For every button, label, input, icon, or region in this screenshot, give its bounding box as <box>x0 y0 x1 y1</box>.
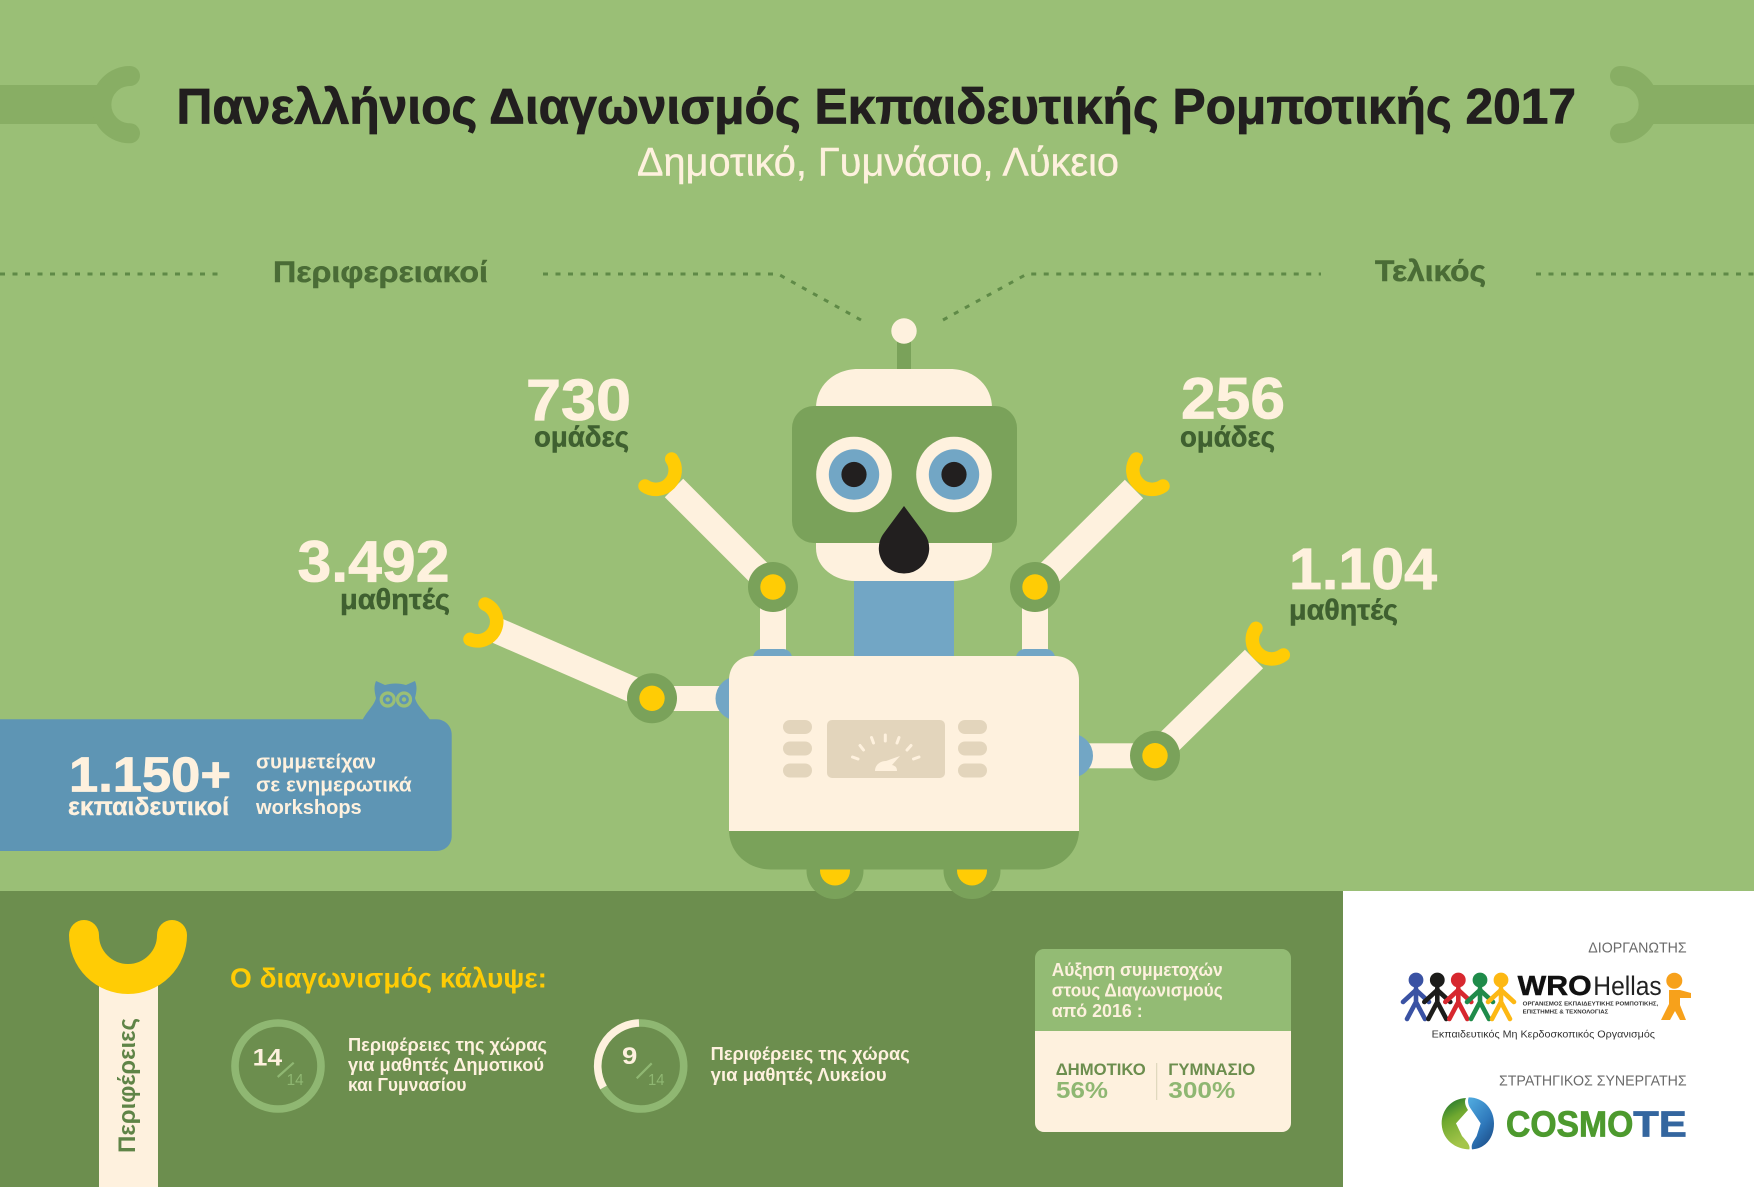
panel: teachers callout <box>0 681 452 851</box>
label: strategic partner: ΣΤΡΑΤΗΓΙΚΟΣ ΣΥΝΕΡΓΑΤΗΣ <box>1499 1073 1687 1090</box>
icon: owl <box>362 681 431 721</box>
heading: coverage: Ο διαγωνισμός κάλυψε: <box>230 963 547 994</box>
title: Πανελλήνιος Διαγωνισμός Εκπαιδευτικής Ρομποτικής 2017 <box>176 78 1576 134</box>
ring chart: 14 of 14 <box>235 1023 321 1109</box>
panel: growth box <box>1035 949 1291 1132</box>
ring chart: 14 of 14: 14 <box>287 1072 304 1089</box>
arm: upper right <box>1010 459 1163 669</box>
callout description <box>255 750 412 819</box>
callout box <box>0 719 452 851</box>
growth: primary <box>1056 1060 1146 1103</box>
growth heading: Αύξηση συμμετοχών <box>1052 960 1223 981</box>
text: upper secondary regions: για μαθητές Λυκείου <box>711 1065 887 1085</box>
stat: 3.492 students: 3.492 <box>298 530 450 595</box>
callout description: σε ενημερωτικά <box>256 774 412 797</box>
growth: lower secondary: ΓΥΜΝΑΣΙΟ <box>1168 1060 1255 1079</box>
organisation name small print: ΟΡΓΑΝΙΣΜΟΣ ΕΚΠΑΙΔΕΥΤΙΚΗΣ ΡΟΜΠΟΤΙΚΗΣ, <box>1523 1002 1659 1008</box>
Hellas wordmark: Hellas <box>1593 971 1662 1001</box>
text: primary and lower secondary regions: για μαθητές Δημοτικού <box>348 1055 544 1075</box>
orange figure <box>1661 973 1691 1020</box>
WRO wordmark: WRO <box>1518 970 1592 1001</box>
growth heading <box>1052 960 1223 1021</box>
organisation name small print <box>1523 1002 1659 1015</box>
robot neck <box>854 578 954 658</box>
text: primary and lower secondary regions: και Γυμνασίου <box>348 1075 466 1095</box>
growth heading: από 2016 : <box>1052 1001 1143 1021</box>
growth: lower secondary <box>1168 1060 1255 1103</box>
logo: Cosmote <box>1442 1097 1687 1149</box>
robot control panel <box>783 720 987 778</box>
ring chart: 9 of 14: 14 <box>648 1072 665 1089</box>
dotted connector lines <box>0 274 1754 320</box>
growth: primary: 56% <box>1056 1077 1108 1103</box>
panel: bottom band <box>0 891 1343 1187</box>
robot head <box>792 369 1017 581</box>
text: upper secondary regions <box>711 1044 910 1085</box>
robot antenna <box>891 318 917 370</box>
stat: 730 teams <box>526 368 631 454</box>
stat: 1.104 students: 1.104 <box>1289 537 1437 602</box>
stat: 256 teams: 256 <box>1181 366 1285 431</box>
ring chart: 9 of 14 <box>598 1023 684 1109</box>
icon: left header wrench <box>0 76 130 133</box>
stat: 1.104 students: μαθητές <box>1289 594 1398 626</box>
callout description: συμμετείχαν <box>256 750 376 773</box>
subtitle: Δημοτικό, Γυμνάσιο, Λύκειο <box>637 140 1119 184</box>
cosmote wordmark: COSMO <box>1506 1104 1633 1145</box>
icon: right header wrench <box>1620 76 1754 133</box>
text: primary and lower secondary regions: Περιφέρειες της χώρας <box>348 1035 547 1055</box>
label: organiser: ΔΙΟΡΓΑΝΩΤΗΣ <box>1588 939 1687 956</box>
stat: 256 teams: ομάδες <box>1180 422 1275 454</box>
callout label: εκπαιδευτικοί <box>68 793 229 821</box>
ring chart: 14 of 14: 14 <box>253 1044 283 1072</box>
text: primary and lower secondary regions <box>348 1035 547 1095</box>
robot base <box>729 830 1079 870</box>
growth: lower secondary: 300% <box>1168 1077 1235 1103</box>
stat: 3.492 students: μαθητές <box>340 584 450 616</box>
ring chart: 9 of 14: 9 <box>622 1043 637 1070</box>
text: upper secondary regions: Περιφέρειες της χώρας <box>711 1044 910 1064</box>
callout number: 1.150+ <box>69 749 231 803</box>
arm: upper left <box>645 459 798 669</box>
organisation name small print: ΕΠΙΣΤΗΜΗΣ & ΤΕΧΝΟΛΟΓΙΑΣ <box>1523 1009 1609 1015</box>
cosmote swirl icon <box>1442 1097 1494 1149</box>
stat: 256 teams <box>1180 366 1285 454</box>
arm: lower left <box>470 604 760 723</box>
panel: white sponsors <box>1343 891 1754 1187</box>
stat: 730 teams: 730 <box>526 368 631 433</box>
robot illustration <box>470 318 1283 899</box>
arm: lower right <box>1049 628 1283 781</box>
robot body <box>729 656 1079 831</box>
stat: 730 teams: ομάδες <box>534 422 629 454</box>
growth heading: στους Διαγωνισμούς <box>1052 981 1223 1001</box>
paper-chain people <box>1403 973 1514 1019</box>
heading: regional: Περιφερειακοί <box>273 256 488 289</box>
logo: WRO Hellas <box>1403 970 1691 1020</box>
logo: Cosmote: TE <box>1633 1104 1687 1145</box>
growth: primary: ΔΗΜΟΤΙΚΟ <box>1056 1060 1146 1079</box>
robot wheels <box>806 842 1000 899</box>
icon: regions wrench <box>84 935 172 1187</box>
callout description: workshops <box>255 796 362 819</box>
heading: final: Τελικός <box>1375 255 1486 288</box>
logo tagline: Εκπαιδευτικός Μη Κερδοσκοπικός Οργανισμός <box>1432 1029 1655 1041</box>
vertical label: Περιφέρειες <box>114 1018 141 1153</box>
